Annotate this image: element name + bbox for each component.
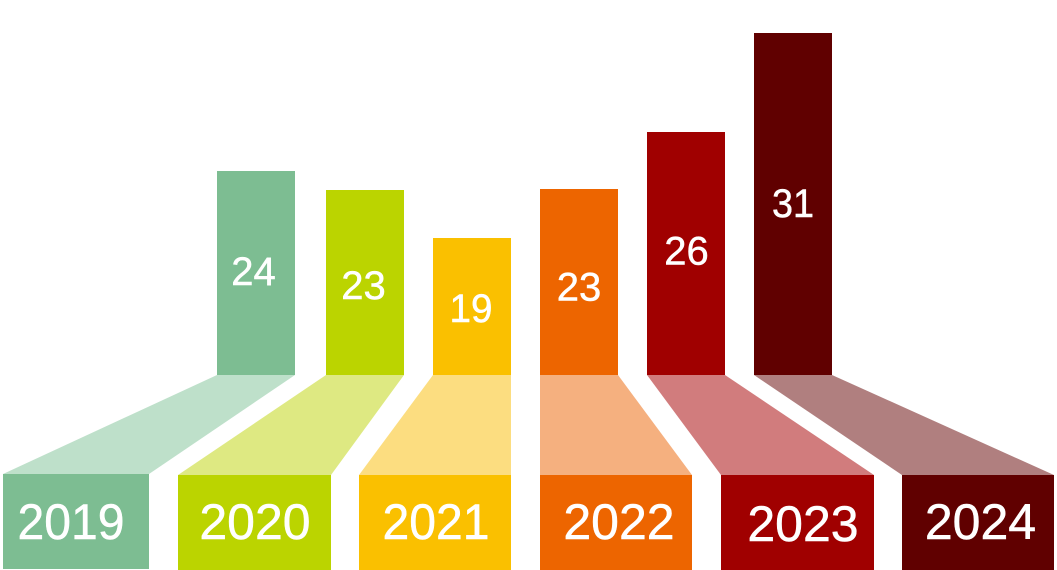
year label: 2021: 2021 bbox=[382, 494, 490, 550]
perspective connector: 2020 bbox=[178, 375, 404, 475]
year label: 2020: 2020 bbox=[199, 494, 311, 550]
bar: 2022 value 23 bbox=[540, 189, 618, 375]
perspective connector: 2023 bbox=[647, 375, 874, 475]
value label: 26: 26 bbox=[664, 230, 709, 274]
perspective connector: 2019 bbox=[3, 375, 295, 474]
perspective connector: 2021 bbox=[359, 375, 511, 475]
year box: 2020 bbox=[178, 475, 331, 570]
year box: 2019 bbox=[3, 474, 149, 569]
column group: 2021 bbox=[359, 238, 511, 570]
year label: 2022: 2022 bbox=[563, 494, 675, 550]
perspective connector: 2022 bbox=[540, 375, 692, 475]
column group: 2022 bbox=[540, 189, 692, 570]
bar: 2023 value 26 bbox=[647, 132, 725, 375]
value label: 31: 31 bbox=[772, 182, 814, 226]
year box: 2021 bbox=[359, 475, 511, 570]
bar: 2024 value 31 bbox=[754, 33, 832, 375]
year box: 2022 bbox=[540, 475, 692, 570]
column group: 2019 bbox=[3, 171, 295, 569]
year box: 2024 bbox=[902, 475, 1054, 570]
value label: 19: 19 bbox=[450, 287, 492, 331]
value label: 24: 24 bbox=[231, 250, 276, 294]
year label: 2024: 2024 bbox=[925, 494, 1036, 550]
perspective connector: 2024 bbox=[754, 375, 1054, 475]
column group: 2024 bbox=[754, 33, 1054, 570]
value label: 23: 23 bbox=[341, 264, 386, 308]
bar: 2021 value 19 bbox=[433, 238, 511, 375]
column group: 2023 bbox=[647, 132, 874, 570]
bar: 2019 value 24 bbox=[217, 171, 295, 375]
year label: 2019: 2019 bbox=[18, 494, 124, 550]
bar: 2020 value 23 bbox=[326, 190, 404, 375]
year label: 2023: 2023 bbox=[747, 496, 859, 552]
year box: 2023 bbox=[721, 475, 874, 570]
column group: 2020 bbox=[178, 190, 404, 570]
value label: 23: 23 bbox=[557, 266, 601, 310]
